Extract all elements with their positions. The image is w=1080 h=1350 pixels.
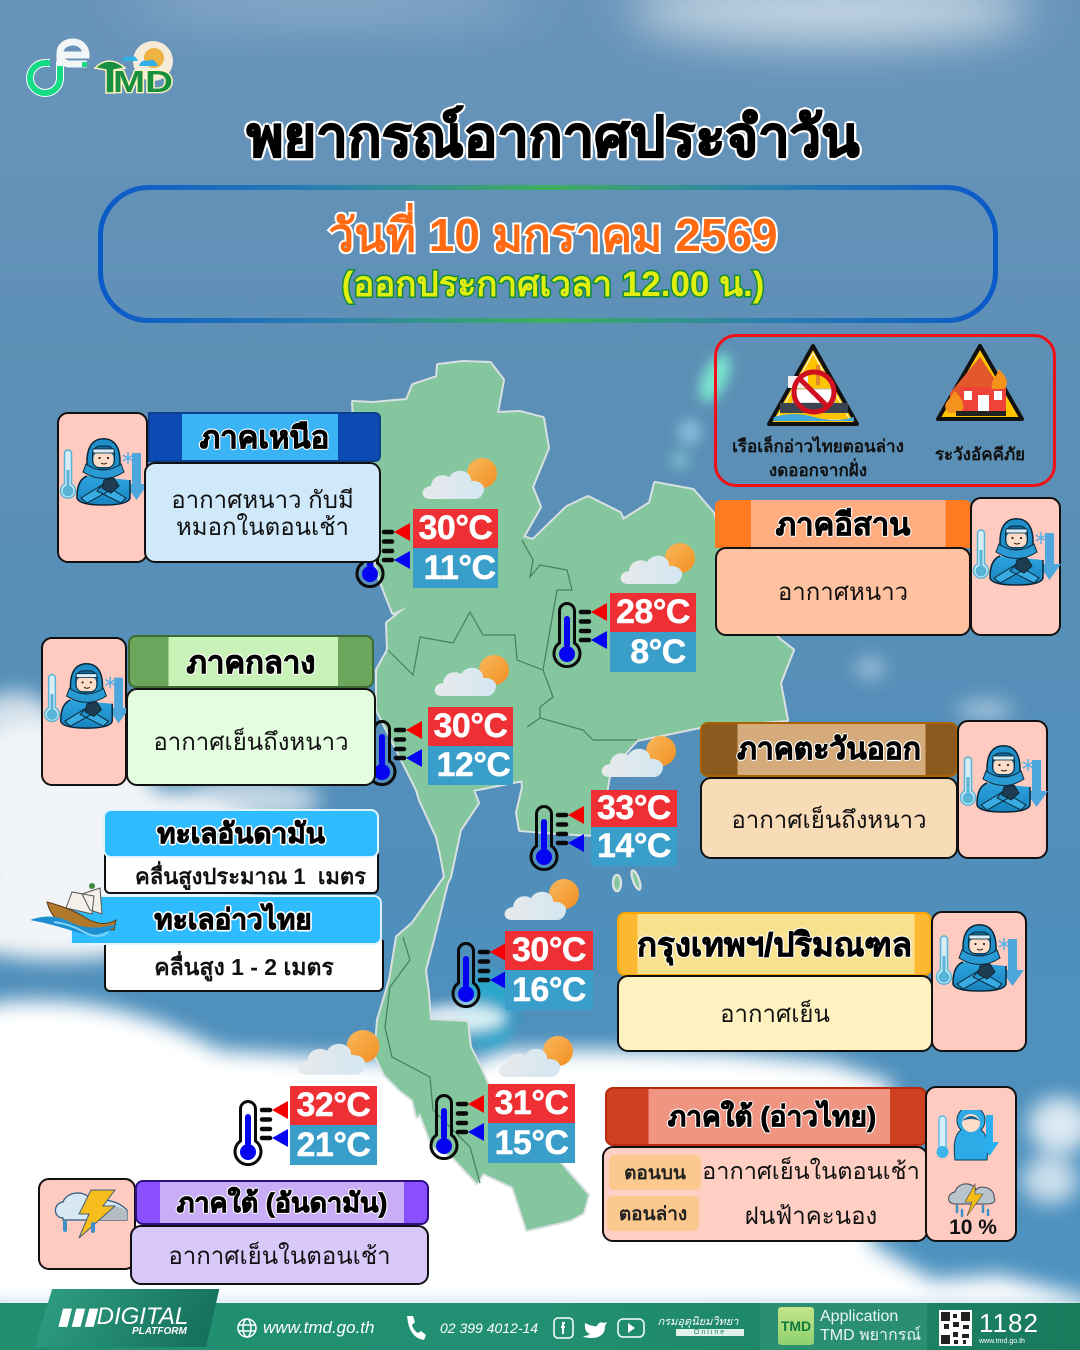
heading: ภาคใต้ (อ่าวไทย) bbox=[668, 1100, 876, 1132]
low bbox=[610, 632, 696, 672]
panel: north bbox=[57, 412, 381, 563]
application panel bbox=[760, 1303, 927, 1350]
low: 15°C bbox=[495, 1124, 568, 1162]
andaman heading bbox=[103, 809, 379, 858]
panel: sea forecast bbox=[30, 809, 384, 992]
heading bbox=[605, 1087, 927, 1146]
forecast body bbox=[602, 1146, 928, 1242]
logos: DE and TMD: MD bbox=[113, 64, 173, 99]
text: lower: ฝนฟ้าคะนอง bbox=[745, 1203, 877, 1230]
footer bar bbox=[0, 1289, 1080, 1350]
forecast text: อากาศหนาว bbox=[778, 579, 908, 606]
logos: DE and TMD bbox=[26, 38, 173, 99]
icon: cold person bbox=[931, 911, 1027, 1052]
digital platform badge: PLATFORM bbox=[132, 1326, 187, 1337]
forecast text bbox=[617, 975, 933, 1052]
heading bbox=[128, 635, 374, 688]
caption: small boats: เรือเล็กอ่าวไทยตอนล่าง bbox=[732, 437, 904, 456]
tag: upper: ตอนบน bbox=[624, 1162, 686, 1184]
gulf wave text bbox=[104, 940, 384, 992]
low: 8°C bbox=[630, 632, 686, 670]
temperature: northeast bbox=[552, 543, 696, 672]
cloud sun icon bbox=[498, 1036, 573, 1077]
app text bbox=[820, 1308, 921, 1344]
tag: lower: ตอนล่าง bbox=[619, 1204, 687, 1224]
issue time: (ออกประกาศเวลา 12.00 น.) bbox=[342, 264, 764, 304]
heading bbox=[617, 912, 932, 976]
department name: กรมอุตุนิยมวิทยา bbox=[658, 1316, 738, 1328]
low: 11°C bbox=[423, 548, 496, 586]
low: 12°C bbox=[437, 746, 510, 784]
date panel bbox=[98, 185, 998, 323]
app icon: TMD bbox=[781, 1318, 811, 1334]
panel: isan bbox=[715, 497, 1061, 636]
temperature: north bbox=[356, 458, 498, 588]
cloud sun icon bbox=[298, 1030, 380, 1075]
thermometer bbox=[430, 1094, 484, 1160]
heading: ภาคกลาง bbox=[187, 644, 315, 680]
thermometer bbox=[552, 602, 607, 668]
thermometer bbox=[452, 942, 505, 1008]
low: 21°C bbox=[297, 1126, 370, 1164]
cloud sun icon bbox=[422, 458, 497, 499]
cloud sun icon bbox=[504, 879, 579, 920]
low: 16°C bbox=[512, 970, 586, 1008]
icon: ship bbox=[30, 883, 118, 937]
panel: south andaman bbox=[38, 1178, 429, 1285]
forecast text: อากาศเย็นถึงหนาว bbox=[731, 806, 927, 834]
icon: cold person bbox=[57, 412, 148, 563]
title: พยากรณ์อากาศประจำวัน bbox=[247, 104, 859, 168]
temperature: south andaman bbox=[234, 1030, 380, 1166]
icon: cold person bbox=[957, 720, 1048, 859]
forecast text bbox=[715, 547, 971, 636]
icon: storm bbox=[38, 1178, 136, 1270]
andaman wave text: คลื่นสูงประมาณ 1 เมตร bbox=[135, 864, 366, 888]
thermometer bbox=[234, 1100, 288, 1166]
department name bbox=[658, 1316, 744, 1336]
gulf wave text: คลื่นสูง 1 - 2 เมตร bbox=[154, 954, 334, 980]
caption: fire: ระวังอัคคีภัย bbox=[935, 444, 1025, 464]
temperature: Bangkok bbox=[452, 879, 593, 1010]
forecast text: อากาศเย็นในตอนเช้า bbox=[168, 1242, 391, 1270]
social icons bbox=[553, 1317, 645, 1339]
forecast text bbox=[126, 688, 376, 786]
hotline: 1182 bbox=[979, 1308, 1039, 1338]
andaman heading: ทะเลอันดามัน bbox=[157, 818, 325, 848]
digital platform badge: ▮▮▮DIGITAL bbox=[57, 1303, 188, 1330]
phone: 02 399 4012-14 bbox=[440, 1320, 538, 1336]
icon: cold person bbox=[41, 637, 127, 786]
thermometer bbox=[372, 720, 422, 786]
tag: upper bbox=[609, 1155, 701, 1190]
high: 31°C bbox=[495, 1084, 568, 1122]
high: 28°C bbox=[616, 593, 690, 631]
temperature: east bbox=[530, 736, 677, 872]
heading: ภาคอีสาน bbox=[776, 507, 910, 542]
forecast text: หมอกในตอนเช้า bbox=[176, 514, 349, 541]
department name: Online bbox=[694, 1329, 726, 1336]
high: 33°C bbox=[597, 789, 671, 827]
caption: small boats bbox=[732, 436, 904, 480]
forecast text bbox=[130, 1225, 429, 1285]
thermometer bbox=[530, 805, 584, 872]
cloud sun icon bbox=[620, 543, 695, 584]
warning panel bbox=[714, 334, 1056, 487]
app icon bbox=[778, 1307, 814, 1345]
icon: fire warning bbox=[936, 344, 1024, 421]
high: 32°C bbox=[297, 1086, 370, 1124]
app text: Application bbox=[820, 1308, 898, 1325]
forecast text: อากาศหนาว กับมี bbox=[171, 487, 354, 514]
heading bbox=[135, 1180, 429, 1225]
heading bbox=[715, 500, 971, 548]
panel: east bbox=[700, 720, 1048, 859]
forecast text bbox=[144, 462, 381, 563]
heading: กรุงเทพฯ/ปริมณฑล bbox=[637, 926, 912, 962]
forecast text bbox=[700, 777, 958, 859]
heading: ภาคเหนือ bbox=[200, 420, 329, 455]
caption: small boats: งดออกจากฝั่ง bbox=[769, 461, 867, 480]
thermometer bbox=[356, 523, 410, 588]
high: 30°C bbox=[419, 509, 492, 547]
date: วันที่ 10 มกราคม 2569 bbox=[328, 208, 778, 260]
rain chance: 10 % bbox=[949, 1216, 997, 1239]
app text: TMD พยากรณ์ bbox=[820, 1327, 921, 1344]
gulf heading bbox=[70, 895, 382, 945]
forecast text: อากาศเย็นถึงหนาว bbox=[153, 728, 349, 756]
high: 30°C bbox=[434, 707, 507, 745]
heading bbox=[148, 412, 381, 462]
heading: ภาคตะวันออก bbox=[737, 733, 921, 766]
andaman wave text bbox=[104, 853, 379, 894]
low: 14°C bbox=[597, 827, 671, 865]
temperature: south gulf bbox=[430, 1036, 575, 1163]
cloud sun icon bbox=[602, 736, 676, 777]
heading: ภาคใต้ (อันดามัน) bbox=[177, 1188, 387, 1218]
high: 30°C bbox=[512, 931, 586, 969]
forecast text: อากาศเย็น bbox=[720, 1001, 830, 1028]
panel: central bbox=[41, 635, 376, 786]
panel: south gulf bbox=[602, 1086, 1017, 1242]
website: www.tmd.go.th bbox=[263, 1318, 374, 1337]
hotline: www.tmd.go.th bbox=[979, 1338, 1025, 1345]
panel: Bangkok and vicinity bbox=[617, 911, 1027, 1052]
gulf heading: ทะเลอ่าวไทย bbox=[154, 904, 312, 935]
icon: cold person bbox=[970, 497, 1061, 636]
text: upper: อากาศเย็นในตอนเช้า bbox=[702, 1158, 920, 1184]
cloud sun icon bbox=[434, 655, 509, 696]
phone bbox=[407, 1316, 538, 1340]
QR code bbox=[939, 1310, 972, 1346]
icon: small boat warning bbox=[767, 344, 860, 426]
tag: lower bbox=[607, 1196, 699, 1231]
heading bbox=[700, 722, 958, 777]
temperature: central bbox=[372, 655, 513, 786]
digital platform badge bbox=[35, 1289, 225, 1347]
icon panel: cold and storm bbox=[925, 1086, 1017, 1242]
